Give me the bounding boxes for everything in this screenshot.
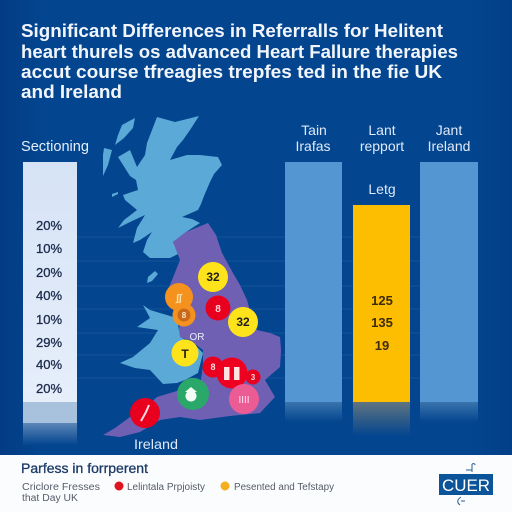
footer heading: Parfess in forrperent	[21, 461, 148, 476]
marker: green	[177, 378, 209, 410]
logo: CUER	[439, 464, 493, 505]
bar label: Letg: Letg	[368, 181, 396, 197]
map region: Hebrides	[103, 118, 135, 197]
legend text: first item: Criclore Fresses	[22, 482, 100, 493]
marker: pink: IIII	[238, 395, 250, 406]
bar heading: Jant Ireland: Ireland	[428, 138, 470, 154]
marker: red large pause	[216, 358, 248, 388]
bar reflection	[353, 402, 410, 436]
title	[21, 21, 458, 102]
bar heading: Lant repport: repport	[360, 138, 404, 154]
marker: orange small	[172, 304, 196, 326]
logo: CUER: CUER	[442, 476, 490, 495]
marker: yellow 32 east: 32	[236, 315, 250, 329]
yellow bar	[353, 205, 410, 402]
legend item: red: Lelintala Prpjoisty	[127, 482, 205, 493]
panel: sectioning column	[21, 138, 89, 445]
label: OR: OR	[190, 332, 204, 343]
marker: orange large: ∫∫	[175, 293, 183, 304]
marker: red centre	[206, 296, 230, 320]
panel: bar one	[285, 122, 342, 422]
percentage labels: 29%	[36, 335, 62, 350]
marker: yellow T: T	[181, 347, 189, 361]
panel: bar two	[353, 122, 410, 436]
marker: red centre: 8	[215, 304, 221, 315]
title: heart thurels os advanced Heart Fallure therapies	[21, 42, 458, 62]
column base	[23, 402, 77, 423]
column reflection	[23, 423, 77, 445]
title: and Ireland	[21, 82, 122, 102]
bar heading: Lant repport: Lant	[368, 122, 396, 138]
marker: red small right	[246, 370, 260, 384]
percentage labels: 10%	[36, 312, 62, 327]
marker: red southwest	[130, 398, 160, 428]
legend item: yellow: Pesented and Tefstapy	[234, 482, 334, 493]
marker: red small left	[202, 356, 224, 378]
bar heading: Tain Irafas: Tain	[301, 122, 327, 138]
bar heading: Jant Ireland: Jant	[436, 122, 462, 138]
marker: red small right: 3	[251, 373, 256, 382]
column heading: sectioning: Sectioning	[21, 138, 89, 155]
percentage labels: 10%	[36, 241, 62, 256]
marker: yellow T	[172, 340, 198, 366]
panel: bar three	[420, 122, 478, 422]
map label: Ireland: Ireland	[134, 436, 178, 452]
marker: yellow 32 north	[198, 262, 228, 292]
marker: orange small: 8	[182, 311, 187, 320]
marker: yellow 32 east	[228, 307, 258, 337]
marker: pink	[229, 384, 259, 414]
bar reflection	[285, 402, 342, 422]
marker: red small left: 8	[210, 362, 216, 372]
percentage labels	[36, 218, 62, 396]
marker: orange large	[165, 283, 193, 311]
bar values: 19	[375, 338, 389, 353]
percentage labels: 40%	[36, 357, 62, 372]
bar values: 135	[371, 315, 393, 330]
panel: footer	[0, 455, 512, 512]
bar values	[371, 293, 393, 353]
bar	[420, 162, 478, 402]
bar	[285, 162, 342, 402]
percentage labels: 40%	[36, 288, 62, 303]
map region: island	[147, 271, 158, 283]
title: accut course tfreagies trepfes ted in the fie UK	[21, 62, 442, 82]
percentage labels: 20%	[36, 381, 62, 396]
map region: England	[103, 223, 281, 437]
percentage labels: 20%	[36, 265, 62, 280]
marker: yellow 32 north: 32	[206, 270, 220, 284]
map region: Wales	[120, 305, 203, 384]
bar reflection	[420, 402, 478, 422]
map region: Scotland	[118, 116, 222, 258]
column bar	[23, 162, 77, 402]
bar heading: Tain Irafas: Irafas	[295, 138, 331, 154]
bar values: 125	[371, 293, 393, 308]
legend text: first item: that Day UK	[22, 493, 78, 504]
percentage labels: 20%	[36, 218, 62, 233]
title: Significant Differences in Referralls for Helitent	[21, 21, 443, 41]
map: UK and Ireland	[103, 116, 281, 452]
